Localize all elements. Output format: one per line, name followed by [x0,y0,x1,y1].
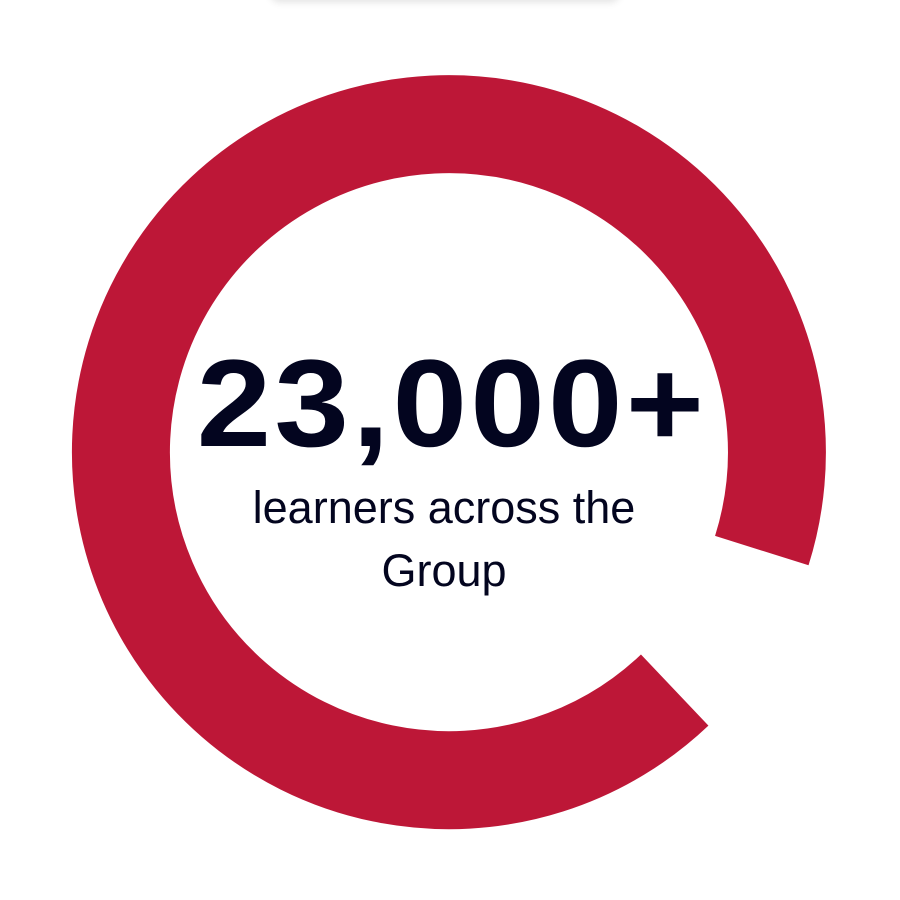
caption: Group [381,545,507,596]
caption [253,482,635,596]
caption: learners across the [253,482,635,533]
big number: 23,000+ [197,335,707,473]
